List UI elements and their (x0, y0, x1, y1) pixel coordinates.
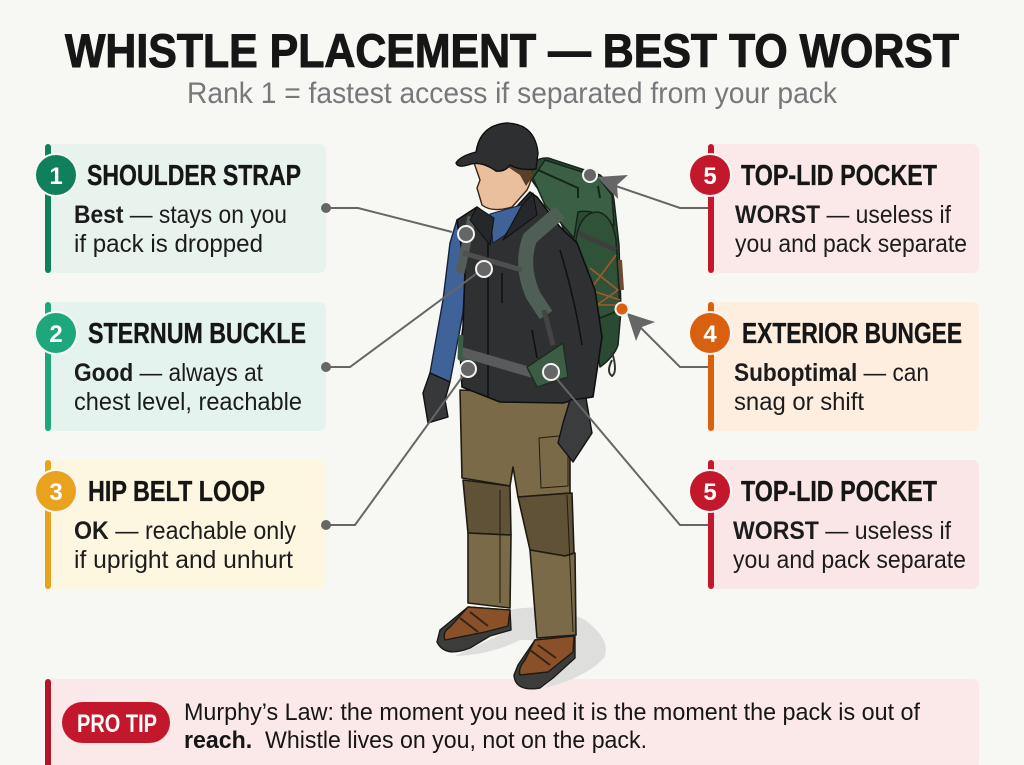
panel: rank 2 sternum buckle: STERNUM BUCKLE (88, 318, 306, 350)
panel: rank 1 shoulder strap: SHOULDER STRAP (87, 160, 301, 192)
marker: sternum buckle (476, 261, 492, 277)
panel: pro tip: reach. Whistle lives on you, not on the pack. (184, 727, 647, 754)
panel: rank 3 hip belt loop (34, 460, 326, 589)
marker: hip pocket (543, 364, 559, 380)
panel: rank 3 hip belt loop: OK — reachable only (74, 517, 296, 545)
jacket collar (470, 193, 537, 245)
title: WHISTLE PLACEMENT — BEST TO WORST (65, 24, 959, 77)
marker: hip belt (460, 361, 476, 377)
ground shadow (455, 608, 606, 688)
panel: rank 1 shoulder strap: 1 (49, 163, 63, 190)
blue sleeve (430, 220, 466, 382)
panel: rank 4 exterior bungee (688, 302, 979, 431)
backpack (528, 158, 622, 376)
panel: rank 5 top-lid pocket lower: WORST — useless if (733, 517, 951, 545)
leader line: hip belt (321, 369, 468, 530)
right glove (558, 398, 592, 462)
shoulder straps and belts (460, 212, 568, 387)
marker: top lid (583, 168, 597, 182)
face (473, 160, 532, 210)
panel: rank 5 top-lid pocket lower (688, 460, 979, 589)
panel: rank 5 top-lid pocket upper: you and pack separate (735, 230, 967, 258)
panel: rank 1 shoulder strap: Best — stays on you (74, 201, 287, 229)
left glove (423, 373, 450, 423)
panel: rank 3 hip belt loop: 3 (49, 479, 63, 506)
leader line: top lid lower (551, 372, 708, 525)
panel: rank 2 sternum buckle: chest level, reachable (74, 388, 302, 416)
panel: pro tip (45, 679, 979, 765)
panel: rank 2 sternum buckle: 2 (49, 321, 63, 348)
panel: pro tip: Murphy’s Law: the moment you need it is the moment the pack is out of (184, 699, 920, 726)
panel: rank 3 hip belt loop: if upright and unhurt (74, 546, 293, 574)
arrow: top lid upper (597, 175, 708, 208)
panel: rank 1 shoulder strap: if pack is dropped (74, 230, 263, 258)
panel: rank 1 shoulder strap (34, 144, 326, 273)
blue shirt collar (490, 203, 528, 243)
panel: rank 3 hip belt loop: HIP BELT LOOP (88, 476, 265, 508)
panel: rank 5 top-lid pocket lower: you and pack separate (733, 546, 966, 574)
panel: rank 5 top-lid pocket upper (688, 144, 979, 273)
panel: rank 5 top-lid pocket upper: TOP-LID POCKET (741, 160, 937, 192)
boots (437, 607, 575, 689)
leader line: sternum buckle (321, 268, 484, 372)
marker: shoulder strap (458, 226, 474, 242)
panel: rank 5 top-lid pocket lower: 5 (703, 479, 717, 506)
panel: rank 4 exterior bungee: Suboptimal — can (734, 359, 929, 387)
panel: rank 2 sternum buckle (34, 302, 326, 431)
panel: rank 5 top-lid pocket lower: TOP-LID POCKET (741, 476, 937, 508)
panel: rank 5 top-lid pocket upper: 5 (703, 163, 717, 190)
subtitle: Rank 1 = fastest access if separated from your pack (187, 77, 838, 110)
trousers (460, 390, 576, 638)
panel: rank 2 sternum buckle: Good — always at (74, 359, 263, 387)
jacket (457, 192, 602, 403)
arrow: bungee (627, 313, 708, 367)
panel: pro tip: PRO TIP (77, 710, 157, 738)
illustration: hiker with backpack (423, 123, 622, 689)
jacket details (488, 243, 582, 398)
panel: rank 4 exterior bungee: EXTERIOR BUNGEE (742, 318, 962, 350)
panel: rank 4 exterior bungee: 4 (703, 321, 717, 348)
panel: rank 4 exterior bungee: snag or shift (734, 388, 864, 416)
leader line: shoulder strap (321, 203, 452, 232)
cap (456, 123, 538, 171)
marker: bungee (616, 302, 628, 316)
hair and ear (505, 165, 533, 186)
panel: rank 5 top-lid pocket upper: WORST — useless if (735, 201, 951, 229)
